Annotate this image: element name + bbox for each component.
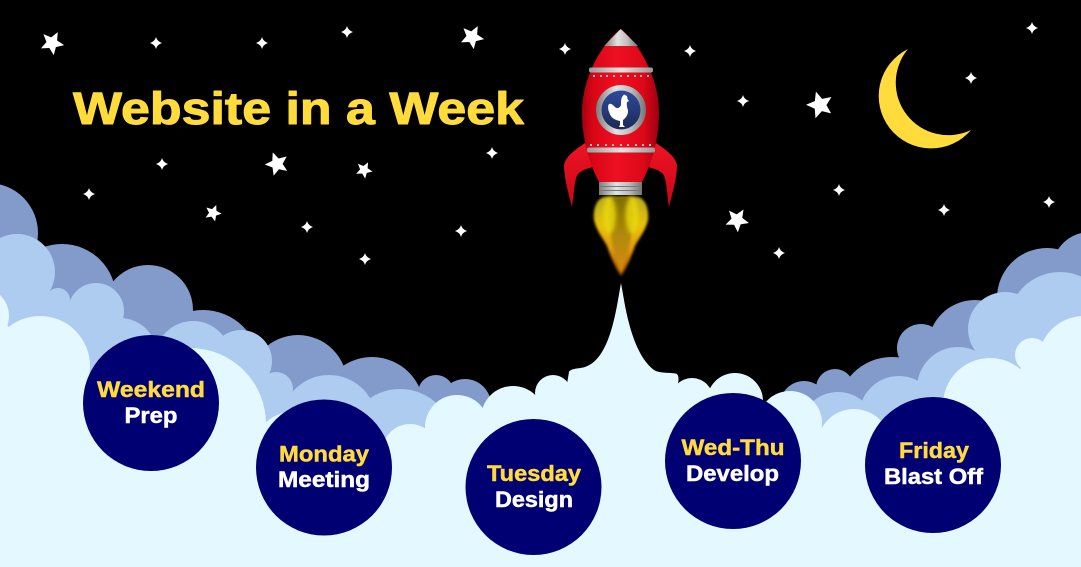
rocket flame <box>594 196 648 277</box>
rocket bands <box>587 68 655 152</box>
step: Weekend Prep: Prep <box>124 403 178 428</box>
step: Weekend Prep: Weekend <box>97 377 205 402</box>
rocket nose cone <box>604 29 638 46</box>
step: Tuesday Design: Design <box>495 487 573 512</box>
rocket porthole with rooster <box>596 85 646 135</box>
step: Wed-Thu Develop: Develop <box>686 461 779 486</box>
step: Friday Blast Off: Blast Off <box>884 464 984 489</box>
step: Wed-Thu Develop <box>665 393 801 529</box>
step: Monday Meeting <box>256 400 392 536</box>
clouds: front layer with launch plume <box>0 283 1081 567</box>
step: Wed-Thu Develop: Wed-Thu <box>682 435 784 460</box>
launch plume <box>560 283 680 425</box>
title: Website in a Week <box>73 83 525 134</box>
step: Tuesday Design <box>466 419 602 555</box>
step: Weekend Prep <box>83 335 219 471</box>
rocket exhaust collar <box>599 181 642 195</box>
rocket fins <box>564 143 677 207</box>
step: Monday Meeting: Meeting <box>278 467 370 492</box>
step: Friday Blast Off <box>865 397 1001 533</box>
icon: crescent moon <box>879 49 971 148</box>
rocket body <box>582 29 659 182</box>
clouds: middle layer <box>0 234 1081 560</box>
step: Friday Blast Off: Friday <box>899 438 969 463</box>
rocket <box>564 29 677 277</box>
rocket rivets <box>590 75 651 146</box>
step: Monday Meeting: Monday <box>279 442 369 466</box>
star field <box>37 21 1055 265</box>
step: Tuesday Design: Tuesday <box>487 461 582 486</box>
clouds: back layer <box>0 183 1081 560</box>
